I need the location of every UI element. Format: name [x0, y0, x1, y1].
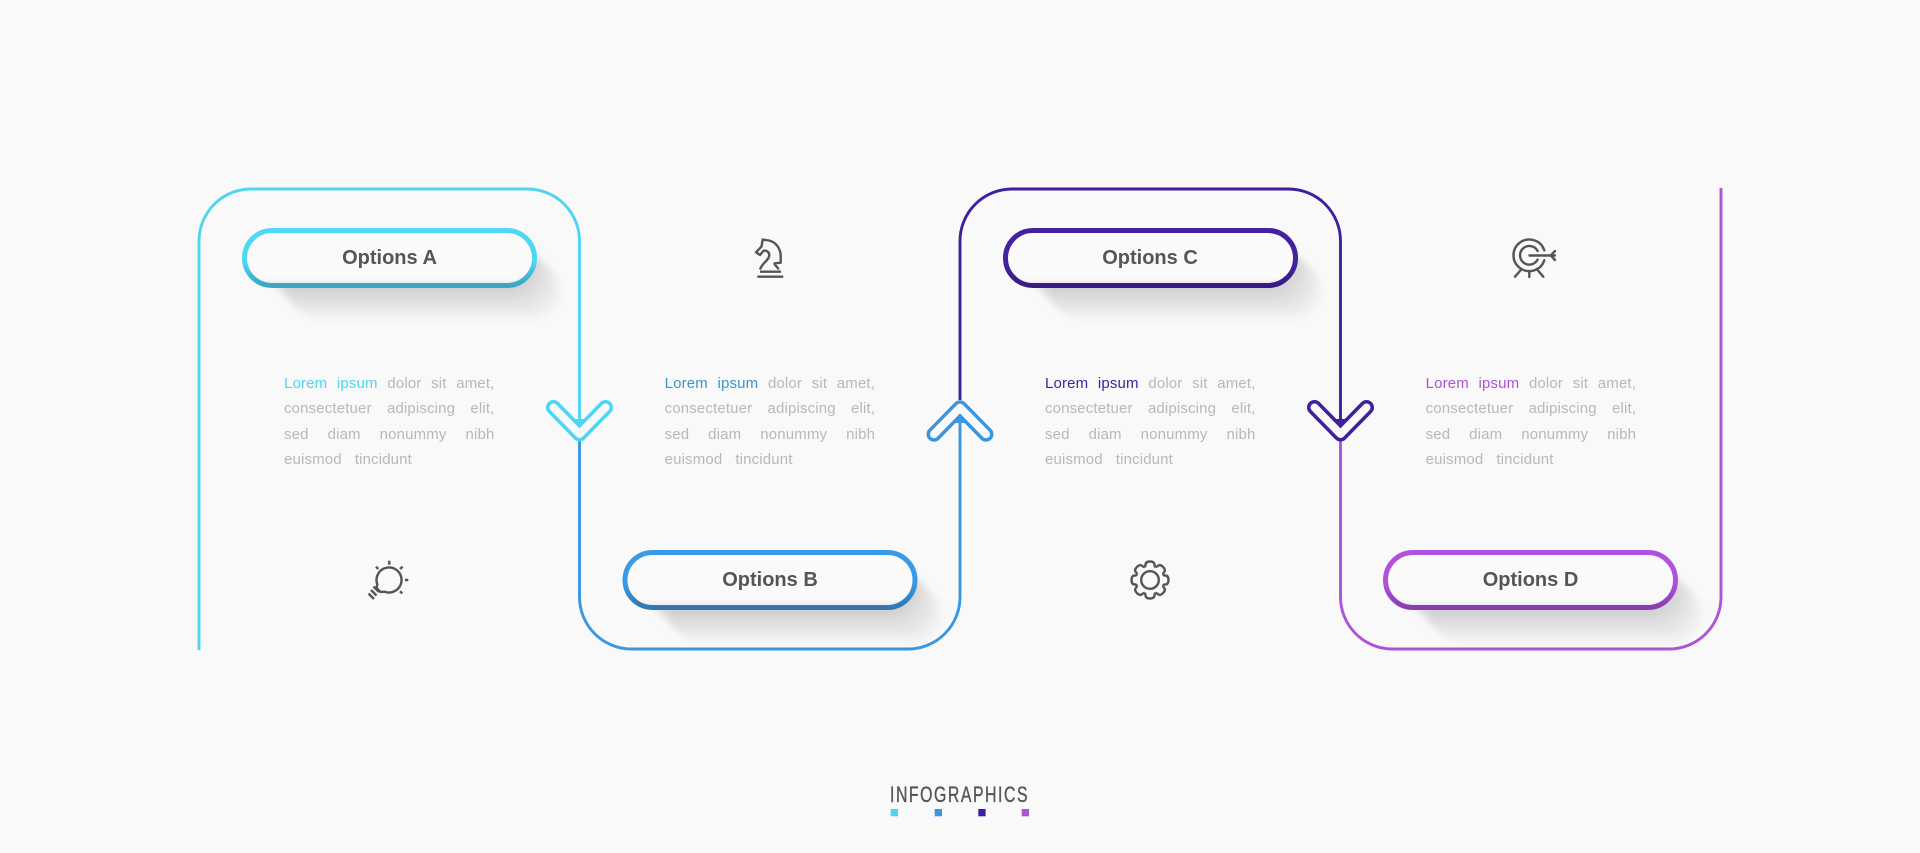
icon: gear: [1132, 562, 1168, 598]
connector line: blue section B: [580, 417, 960, 649]
text block C: sed diam nonummy nibh: [1045, 426, 1256, 443]
pill: Options C: [1006, 230, 1324, 320]
text block C: euismod tincidunt: [1045, 451, 1173, 468]
text block A: euismod tincidunt: [284, 451, 412, 468]
text block A: sed diam nonummy nibh: [284, 426, 494, 443]
icon: target with arrow: [1513, 240, 1555, 277]
pill: Options C: Options C: [1102, 247, 1198, 269]
text block C: [1045, 375, 1256, 468]
icon: light bulb: [368, 561, 408, 599]
pill: Options A: Options A: [342, 247, 437, 269]
text block B: [665, 375, 875, 468]
text block A: [284, 375, 494, 468]
pill: Options D: [1386, 552, 1704, 644]
connector line: magenta section D: [1340, 188, 1721, 649]
pill: Options B: [625, 552, 943, 644]
footer title: INFOGRAPHICS: [890, 784, 1029, 808]
footer colour legend squares: [891, 809, 1029, 816]
text block D: Lorem ipsum dolor sit amet,: [1426, 375, 1636, 392]
text block D: consectetuer adipiscing elit,: [1426, 400, 1636, 417]
connector line: cyan section A: [199, 189, 580, 650]
text block D: euismod tincidunt: [1426, 451, 1554, 468]
arrow: purple chevron down: [1314, 408, 1366, 434]
icon: chess knight: [756, 240, 783, 277]
pill: Options B: Options B: [722, 569, 818, 591]
pill: Options A: [244, 230, 562, 320]
connector line: purple section C: [960, 189, 1340, 425]
text block C: consectetuer adipiscing elit,: [1045, 400, 1256, 417]
text block C: Lorem ipsum dolor sit amet,: [1045, 375, 1255, 392]
text block B: consectetuer adipiscing elit,: [665, 400, 875, 417]
text block A: Lorem ipsum dolor sit amet,: [284, 375, 494, 392]
arrow: blue chevron up: [934, 408, 986, 434]
pill: Options D: Options D: [1483, 569, 1578, 591]
text block B: euismod tincidunt: [665, 451, 793, 468]
text block A: consectetuer adipiscing elit,: [284, 400, 494, 417]
text block B: sed diam nonummy nibh: [665, 426, 875, 443]
text block B: Lorem ipsum dolor sit amet,: [665, 375, 875, 392]
text block D: [1426, 375, 1636, 468]
text block D: sed diam nonummy nibh: [1426, 426, 1636, 443]
arrow: cyan chevron down: [554, 408, 606, 434]
